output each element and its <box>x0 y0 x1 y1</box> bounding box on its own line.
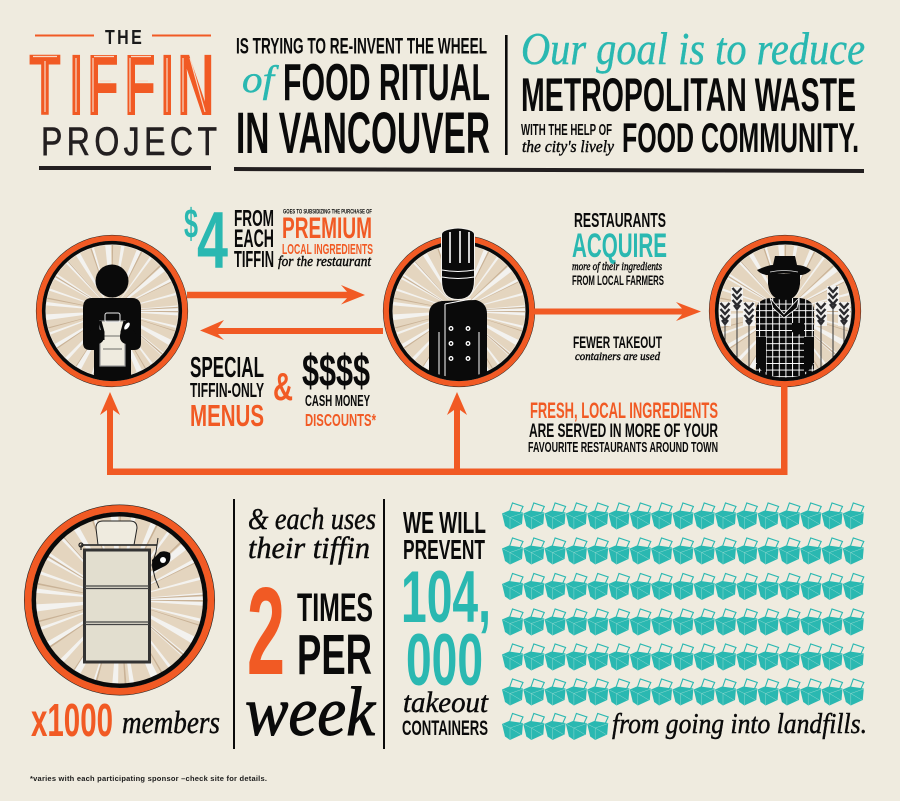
text: two times per week: week <box>245 674 377 751</box>
text: four dollars from each tiffin: FROM <box>234 205 274 231</box>
text: four dollars from each tiffin: $ <box>184 200 198 247</box>
icon: farmer with wheat <box>709 235 861 387</box>
panel: header <box>29 23 865 173</box>
panel: impact numbers <box>24 499 867 751</box>
text: fresh local ingredients <box>528 398 718 456</box>
text: four dollars from each tiffin: for the restaurant <box>278 254 372 270</box>
text: we will prevent 104,000: takeout <box>403 686 489 719</box>
text: four dollars from each tiffin: PREMIUM <box>282 212 372 245</box>
text: special menus and discounts: TIFFIN-ONLY <box>190 380 264 402</box>
text: two times per week: their tiffin <box>248 530 370 565</box>
icon: tiffin carrier <box>24 505 215 695</box>
heading: goal statement: the city's lively <box>522 137 614 156</box>
text: special menus and discounts: DISCOUNTS* <box>305 410 376 430</box>
text: four dollars from each tiffin: GOES TO SUBSIDIZING THE PURCHASE OF <box>283 210 372 216</box>
text: we will prevent 104,000: PREVENT <box>403 534 485 565</box>
arrow: restaurant to farmer <box>534 302 701 321</box>
logo: The Tiffin Project: PROJECT <box>41 119 217 164</box>
icon: chef <box>383 228 535 387</box>
text: two times per week: PER <box>297 623 372 687</box>
text: two times per week: & each uses <box>248 501 376 536</box>
logo: The Tiffin Project: THE <box>105 26 142 48</box>
text: two times per week: TIMES <box>297 586 373 630</box>
heading: goal statement: WITH THE HELP OF <box>521 122 612 139</box>
footnote: *varies with each participating sponsor –check site for details. <box>30 774 267 783</box>
text: four dollars from each tiffin: 4 <box>197 196 228 286</box>
chart: takeout container pictogram <box>502 503 864 740</box>
text: four dollars from each tiffin <box>184 196 373 286</box>
heading: food ritual statement: FOOD RITUAL <box>283 54 490 112</box>
divider bar <box>505 35 508 155</box>
text: we will prevent 104,000: CONTAINERS <box>402 717 488 740</box>
text: x1000 members: x1000 <box>31 694 113 746</box>
icon: tiffin member <box>36 235 188 387</box>
text: x1000 members <box>31 694 220 746</box>
arrow: restaurant to member <box>200 320 383 340</box>
text: four dollars from each tiffin: TIFFIN <box>234 246 274 272</box>
heading: food ritual statement: of <box>242 59 279 101</box>
text: special menus and discounts: SPECIAL <box>190 352 264 384</box>
text: restaurants acquire: FROM LOCAL FARMERS <box>572 272 664 288</box>
divider bar <box>383 499 385 749</box>
text: fewer takeout containers: containers are used <box>575 349 661 363</box>
logo: The Tiffin Project <box>29 26 217 170</box>
text: fresh local ingredients: FRESH, LOCAL INGREDIENTS <box>530 398 718 423</box>
text: we will prevent 104,000: 000 <box>406 620 483 701</box>
text: we will prevent 104,000 <box>401 505 491 740</box>
text: from going into landfills: from going into landfills. <box>612 709 867 740</box>
text: x1000 members: members <box>122 704 220 740</box>
text: fresh local ingredients: FAVOURITE RESTAURANTS AROUND TOWN <box>528 440 718 456</box>
text: four dollars from each tiffin: LOCAL INGREDIENTS <box>282 241 373 258</box>
text: special menus and discounts <box>190 345 376 433</box>
heading: food ritual statement: IS TRYING TO RE-INVENT THE WHEEL <box>236 34 487 58</box>
text: fewer takeout containers: FEWER TAKEOUT <box>573 333 662 352</box>
text: special menus and discounts: $$$$ <box>302 345 370 396</box>
panel: flow diagram <box>36 196 861 475</box>
text: fewer takeout containers <box>573 333 662 363</box>
divider bar <box>233 499 235 749</box>
heading: food ritual statement <box>236 34 490 166</box>
text: restaurants acquire: RESTAURANTS <box>574 210 666 232</box>
text: restaurants acquire: ACQUIRE <box>572 227 667 265</box>
text: two times per week <box>245 501 377 751</box>
text: we will prevent 104,000: WE WILL <box>403 505 486 540</box>
text: special menus and discounts: CASH MONEY <box>305 393 370 410</box>
heading: goal statement <box>521 23 865 161</box>
text: two times per week: 2 <box>247 563 285 701</box>
text: special menus and discounts: MENUS <box>190 398 264 433</box>
text: four dollars from each tiffin: EACH <box>234 225 274 253</box>
arrow: farmer to restaurant and member <box>100 386 788 475</box>
text: restaurants acquire <box>572 210 667 288</box>
text: fresh local ingredients: ARE SERVED IN MORE OF YOUR <box>529 420 718 442</box>
text: we will prevent 104,000: 104, <box>401 557 491 638</box>
arrow: member to restaurant <box>187 285 365 304</box>
logo: The Tiffin Project: TIFFIN <box>29 37 215 134</box>
heading: food ritual statement: IN VANCOUVER <box>236 101 490 166</box>
text: restaurants acquire: more of their ingredients <box>572 259 662 273</box>
header rule <box>234 167 864 173</box>
text: special menus and discounts: & <box>273 366 293 409</box>
